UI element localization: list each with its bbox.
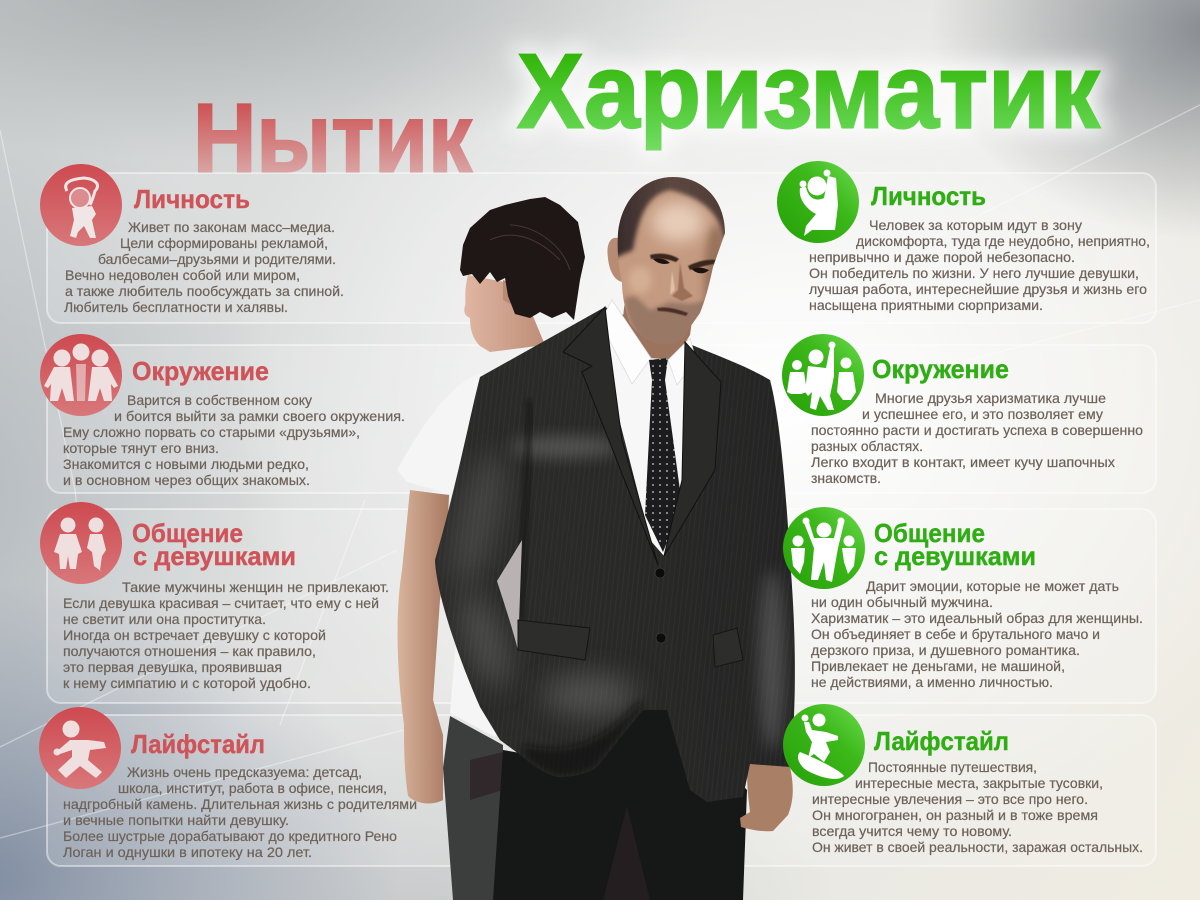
- icon: surfer green: [783, 704, 865, 786]
- panel: Нытик Личность: балбесами–друзьями и родителями.: [98, 252, 336, 267]
- panel: Харизматик Общение: [783, 507, 1143, 690]
- panel: Харизматик Окружение: и успешнее его, и это позволяет ему: [862, 407, 1103, 422]
- panel: Харизматик Лайфстайл: Он многогранен, он разный и в тоже время: [812, 808, 1098, 823]
- panel: Харизматик Лайфстайл: Лайфстайл: [874, 726, 1009, 756]
- panel: Нытик Лайфстайл: и вечные попытки найти девушку.: [63, 813, 289, 828]
- trousers: [493, 700, 747, 900]
- panel: Нытик Личность: а также любитель пообсуждать за спиной.: [65, 284, 344, 299]
- panel: Нытик Общение: Такие мужчины женщин не привлекают.: [122, 580, 389, 595]
- panel: Харизматик Личность: дискомфорта, туда где неудобно, неприятно,: [856, 234, 1150, 249]
- panel: Харизматик Окружение: Окружение: [872, 354, 1009, 384]
- panel: Харизматик Общение: с девушками: [874, 541, 1036, 571]
- panel: Харизматик Личность: Человек за которым идут в зону: [869, 218, 1082, 233]
- panel: Харизматик Лайфстайл: Постоянные путешествия,: [868, 760, 1037, 775]
- panel: Харизматик Личность: Он победитель по жизни. У него лучшие девушки,: [809, 266, 1139, 281]
- panel: Харизматик Общение: не действиями, а именно личностью.: [811, 675, 1053, 690]
- neck: [622, 300, 695, 360]
- panel: Харизматик Лайфстайл: интересные места, закрытые тусовки,: [855, 776, 1103, 791]
- icon: walking red: [39, 707, 121, 789]
- panel: Харизматик Личность: насыщена приятными сюрпризами.: [809, 298, 1043, 313]
- panel: Нытик Окружение: которые тянут его вниз.: [63, 441, 219, 456]
- panel: Нытик Личность: Вечно недоволен собой или миром,: [65, 268, 300, 283]
- jacket: [430, 300, 800, 810]
- panel: Нытик Общение: получаются отношения – как правило,: [63, 644, 316, 659]
- panel: Харизматик Общение: дерзкого приза, и душевного романтика.: [811, 643, 1080, 658]
- panel: Харизматик Личность: [777, 161, 1150, 313]
- panel: Нытик Окружение: Варится в собственном соку: [127, 393, 312, 408]
- icon: girls green: [783, 507, 865, 589]
- panel: row frames: [47, 173, 1156, 866]
- panel: Нытик Лайфстайл: Лайфстайл: [131, 729, 265, 759]
- panel: Нытик Личность: Личность: [134, 184, 250, 214]
- figure: man in suit: [430, 170, 800, 900]
- panel: Харизматик Общение: Харизматик – это идеальный образ для женщины.: [811, 611, 1143, 626]
- panel: Нытик Общение: Иногда он встречает девушку с которой: [63, 628, 326, 643]
- panel: Харизматик Личность: лучшая работа, интереснейшие друзья и жизнь его: [809, 282, 1147, 297]
- icon: surroundings green: [782, 334, 864, 416]
- panel: Нытик Окружение: [40, 334, 405, 488]
- icon: surroundings red: [40, 334, 122, 416]
- panel: Харизматик Общение: Привлекает не деньгами, не машиной,: [811, 659, 1065, 674]
- panel: Харизматик Общение: ни один обычный мужчина.: [811, 595, 993, 610]
- title: Харизматик: Харизматик: [517, 32, 1101, 150]
- panel: Нытик Общение: не светит или она проститутка.: [63, 612, 266, 627]
- panel: Нытик Окружение: Знакомится с новыми людьми редко,: [63, 457, 309, 472]
- panel: Харизматик Окружение: Легко входит в контакт, имеет кучу шапочных: [811, 455, 1115, 470]
- panel: Харизматик Окружение: знакомств.: [811, 471, 881, 486]
- panel: Нытик Лайфстайл: надгробный камень. Длительная жизнь с родителями: [63, 797, 417, 812]
- panel: Харизматик Личность: непривычно и даже порой небезопасно.: [809, 250, 1075, 265]
- panel: Нытик Лайфстайл: Логан и однушки в ипотеку на 20 лет.: [63, 845, 312, 860]
- panel: Нытик Лайфстайл: школа, институт, работа в офисе, пенсия,: [118, 781, 387, 796]
- title: Нытик: Нытик: [193, 84, 472, 192]
- panel: Нытик Окружение: и боится выйти за рамки своего окружения.: [114, 409, 405, 424]
- panel: Харизматик Окружение: постоянно расти и достигать успеха в совершенно: [811, 423, 1143, 438]
- panel: Харизматик Личность: Личность: [871, 181, 986, 211]
- gap between arm and torso: [497, 540, 522, 650]
- panel: Харизматик Лайфстайл: Он живет в своей реальности, заражая остальных.: [812, 840, 1143, 855]
- panel: Нытик Личность: [40, 164, 344, 315]
- panel: Харизматик Общение: Дарит эмоции, которые не может дать: [866, 579, 1119, 594]
- buttons: [655, 568, 666, 643]
- panel: Харизматик Окружение: Многие друзья харизматика лучше: [875, 391, 1106, 406]
- title: Харизматик: Харизматик: [517, 32, 1101, 150]
- panel: Харизматик Лайфстайл: интересные увлечения – это все про него.: [812, 792, 1088, 807]
- panel: Нытик Личность: Цели сформированы рекламой,: [120, 236, 328, 251]
- panel: Нытик Окружение: и в основном через общих знакомых.: [63, 473, 310, 488]
- panel: Нытик Лайфстайл: Более шустрые дорабатывают до кредитного Рено: [63, 829, 397, 844]
- icon: personality red: [40, 164, 122, 246]
- shirt: [603, 318, 690, 556]
- panel: Нытик Личность: Живет по законам масс–медиа.: [128, 220, 335, 235]
- panel: Харизматик Лайфстайл: всегда учится чему то новому.: [812, 824, 1012, 839]
- panel: Нытик Окружение: Ему сложно порвать со старыми «друзьями»,: [63, 425, 360, 440]
- panel: Нытик Общение: Общение: [132, 518, 243, 548]
- pockets: [518, 620, 743, 667]
- icon: personality green: [777, 161, 859, 243]
- ear: [607, 238, 624, 282]
- lapels: [563, 307, 721, 565]
- panel: Нытик Общение: к нему симпатию и с которой удобно.: [63, 676, 311, 691]
- panel: Нытик Лайфстайл: Жизнь очень предсказуема: детсад,: [127, 765, 362, 780]
- panel: Нытик Общение: с девушками: [133, 541, 296, 571]
- tie: [645, 358, 682, 552]
- panel: Харизматик Общение: Общение: [874, 518, 985, 548]
- panel: Нытик Общение: это первая девушка, проявившая: [63, 660, 282, 675]
- panel: Нытик Общение: Если девушка красивая – считает, что ему с ней: [63, 596, 379, 611]
- panel: Нытик Лайфстайл: [39, 707, 417, 860]
- panel: Нытик Окружение: Окружение: [132, 356, 269, 386]
- icon: girls red: [40, 502, 122, 584]
- figure: boy from behind: [397, 197, 585, 900]
- panel: Харизматик Общение: Он объединяет в себе и брутального мачо и: [811, 627, 1100, 642]
- panel: Харизматик Окружение: [782, 334, 1143, 486]
- face: [618, 177, 725, 342]
- panel: Нытик Общение: [40, 502, 389, 691]
- panel: Нытик Личность: Любитель бесплатности и халявы.: [64, 300, 288, 315]
- collar: [600, 300, 696, 385]
- hand: [740, 763, 793, 831]
- panel: Харизматик Окружение: разных областях.: [811, 439, 923, 454]
- panel: Харизматик Лайфстайл: [783, 704, 1143, 855]
